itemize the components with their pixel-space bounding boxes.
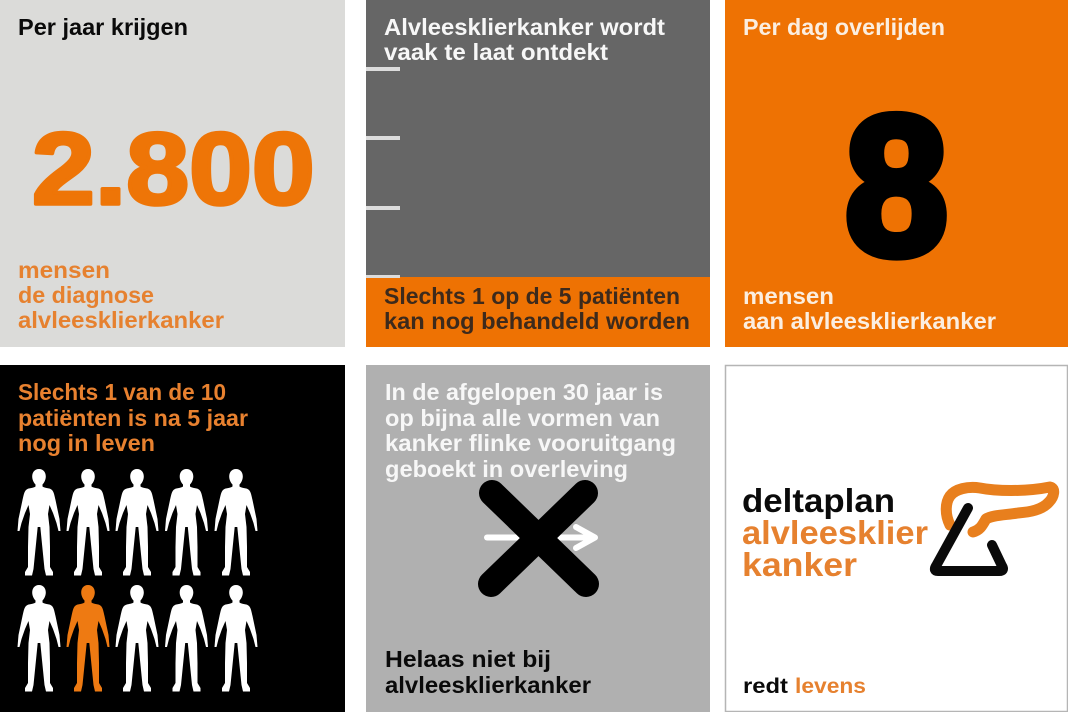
text block: mensen aan alvleesklierkanker: mensen [743, 283, 834, 309]
icon: white arrow [487, 527, 595, 548]
heading: per jaar krijgen: Per jaar krijgen [18, 14, 188, 40]
text block: afgelopen 30 jaar: geboekt in overleving [385, 456, 628, 482]
heading: te laat ontdekt: vaak te laat ontdekt [384, 39, 608, 65]
chart: orange level fill [366, 277, 710, 347]
text block: helaas niet: Helaas niet bij [385, 646, 551, 672]
heading: 1 van de 10: patiënten is na 5 jaar [18, 405, 248, 431]
logo icon: pancreas and triangle [935, 487, 1054, 571]
text block: mensen de diagnose [18, 257, 224, 333]
text block: mensen aan alvleesklierkanker: aan alvleesklierkanker [743, 308, 996, 334]
text block: afgelopen 30 jaar [385, 379, 676, 482]
heading: te laat ontdekt [384, 14, 665, 65]
text block: 1 op de 5 patienten: kan nog behandeld worden [384, 308, 690, 334]
panel: overleving na 5 jaar [0, 365, 345, 712]
logo wordmark [742, 482, 928, 583]
big number: 8: 8 [845, 74, 948, 296]
tagline: redt levens: redt [743, 675, 788, 698]
text block: 1 op de 5 patienten [384, 283, 690, 334]
tagline: redt levens [743, 675, 866, 698]
panel: logo deltaplan [726, 366, 1068, 712]
panel: geen vooruitgang [366, 365, 710, 712]
scale ticks [366, 67, 400, 278]
text block: mensen de diagnose: de diagnose [18, 282, 154, 308]
text block: mensen aan alvleesklierkanker [743, 283, 996, 334]
heading: 1 van de 10: nog in leven [18, 430, 155, 456]
tagline: redt levens: levens [795, 675, 866, 698]
panel: jaarlijkse diagnoses [0, 0, 345, 347]
icon grid: ten people, one orange [18, 469, 258, 692]
heading: per dag overlijden: Per dag overlijden [743, 14, 945, 40]
logo wordmark: alvleesklier [742, 514, 928, 551]
text block: helaas niet: alvleesklierkanker [385, 672, 591, 698]
text block: afgelopen 30 jaar: In de afgelopen 30 jaar is [385, 379, 663, 405]
text block: mensen de diagnose: alvleesklierkanker [18, 307, 224, 333]
text block: afgelopen 30 jaar: kanker flinke vooruitgang [385, 430, 676, 456]
heading: 1 van de 10 [18, 379, 248, 456]
logo wordmark: deltaplan [742, 482, 895, 519]
panel: dagelijkse sterfte [725, 0, 1068, 347]
heading: te laat ontdekt: Alvleesklierkanker wordt [384, 14, 665, 40]
icon: black cross [491, 493, 586, 584]
big number: 2.800: 2.800 [32, 112, 315, 226]
heading: 1 van de 10: Slechts 1 van de 10 [18, 379, 226, 405]
text block: mensen de diagnose: mensen [18, 257, 110, 283]
panel: late ontdekking [366, 0, 710, 347]
text block: helaas niet [385, 646, 591, 698]
text block: afgelopen 30 jaar: op bijna alle vormen van [385, 405, 660, 431]
logo wordmark: kanker [742, 546, 857, 583]
text block: 1 op de 5 patienten: Slechts 1 op de 5 patiënten [384, 283, 680, 309]
